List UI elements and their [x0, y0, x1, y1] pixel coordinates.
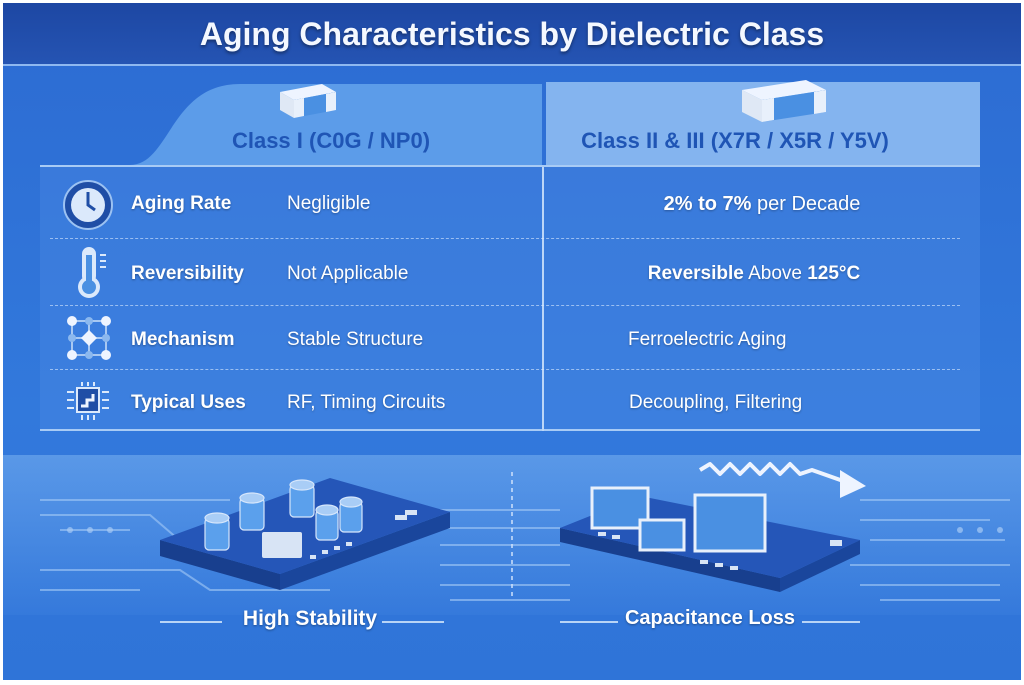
row: aging rate: Aging Rate: [131, 193, 231, 214]
row: typical uses: Typical Uses: [131, 392, 246, 413]
board I: [160, 478, 450, 590]
row: aging rate: Negligible: [287, 193, 370, 214]
icon: lattice: [67, 316, 111, 360]
row: mechanism: Mechanism: [131, 329, 234, 350]
row: mechanism: Ferroelectric Aging: [628, 329, 786, 350]
row: typical uses: Decoupling, Filtering: [629, 392, 802, 413]
header text: Class II & III (X7R / X5R / Y5V): [581, 128, 889, 153]
label: high stability: High Stability: [243, 607, 377, 630]
board II: [560, 488, 860, 592]
row: mechanism: [67, 316, 786, 360]
arrow: wavy: [700, 464, 866, 498]
icon: chip: [280, 84, 336, 118]
row: reversibility: Reversibility: [131, 263, 244, 284]
row: aging rate: [63, 180, 860, 230]
header text: Class I (C0G / NP0): [232, 128, 430, 153]
icon: chip: [67, 382, 109, 420]
row: mechanism: Stable Structure: [287, 329, 423, 350]
header: class I: [132, 84, 542, 165]
header: class II: [546, 82, 980, 165]
row: aging rate: 2% to 7% per Decade: [664, 193, 860, 215]
table: [40, 165, 980, 431]
row: typical uses: RF, Timing Circuits: [287, 392, 445, 413]
row: typical uses: [67, 382, 802, 420]
label: capacitance loss: Capacitance Loss: [625, 607, 795, 629]
row: reversibility: Not Applicable: [287, 263, 408, 284]
row: reversibility: Reversible Above 125°C: [648, 263, 860, 284]
icon: thermometer: [78, 247, 106, 298]
icon: chip large: [742, 80, 826, 122]
illustration band: [3, 455, 1021, 615]
icon: clock: [63, 180, 113, 230]
row: reversibility: [78, 247, 860, 298]
title: Aging Characteristics by Dielectric Class: [200, 16, 824, 52]
title bar: [3, 3, 1021, 66]
